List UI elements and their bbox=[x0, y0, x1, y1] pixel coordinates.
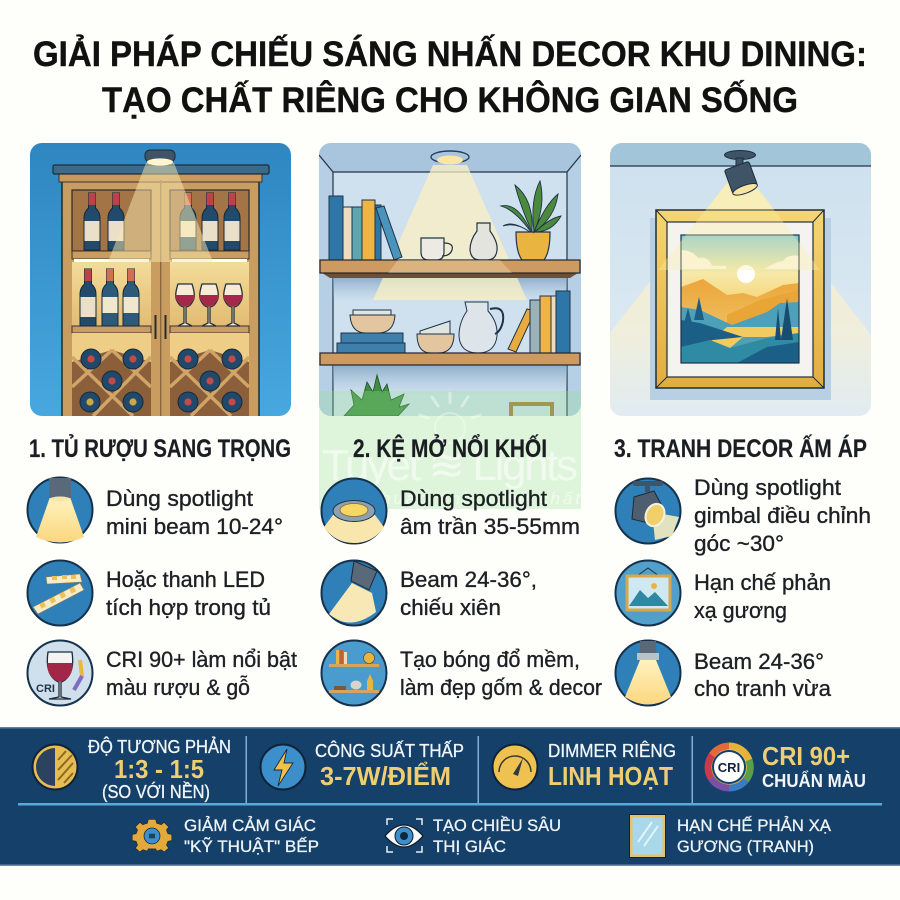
icon: picture bbox=[616, 560, 680, 626]
text: gimbal spotlight: góc ~30° bbox=[694, 531, 784, 556]
stat: CRI: CHUẨN MÀU bbox=[762, 770, 866, 791]
icon: CRI wine glass bbox=[28, 640, 92, 706]
heading: open shelves: 2. KỆ MỞ NỔI KHỐI bbox=[353, 433, 547, 463]
shelf lower bbox=[320, 353, 580, 365]
icon: gear bbox=[132, 819, 172, 852]
stat: contrast: 1:3 - 1:5 bbox=[114, 754, 204, 784]
stat: CRI bbox=[762, 741, 866, 791]
heading: wine cabinet: 1. TỦ RƯỢU SANG TRỌNG bbox=[29, 433, 291, 463]
picture frame bbox=[656, 210, 824, 388]
stat: power: CÔNG SUẤT THẤP bbox=[315, 740, 464, 761]
text: angled beam bbox=[400, 567, 537, 620]
icon: mirror bbox=[630, 814, 666, 858]
icon: CRI colour wheel bbox=[708, 746, 750, 788]
watermark bbox=[319, 391, 581, 509]
icon: shelves with shadows bbox=[322, 640, 386, 706]
stat: dimmer: LINH HOẠT bbox=[548, 761, 673, 791]
icon: CRI wine glass: CRI bbox=[36, 683, 55, 695]
wine bottles bbox=[80, 193, 243, 412]
upper shelf books bbox=[329, 196, 402, 260]
icon: beam cone bbox=[616, 640, 680, 706]
stat: dimmer: DIMMER RIÊNG bbox=[548, 741, 676, 761]
bottom plant and frame bbox=[344, 375, 552, 418]
text: angled beam: Beam 24-36°, bbox=[400, 567, 537, 592]
icon: mini beam spotlight bbox=[28, 478, 92, 542]
text: angled beam: chiếu xiên bbox=[400, 595, 501, 620]
stat: CRI: CRI 90+ bbox=[762, 741, 850, 771]
text: recessed downlight: âm trần 35-55mm bbox=[400, 514, 580, 539]
text: mirror: GƯƠNG (TRANH) bbox=[677, 837, 814, 856]
landscape painting bbox=[681, 235, 799, 363]
text: mini beam: Dùng spotlight bbox=[106, 486, 253, 511]
text: CRI bbox=[106, 647, 297, 700]
ceiling light bbox=[145, 150, 175, 166]
light beam over frame bbox=[658, 183, 820, 270]
lower shelf books, bowls and jug bbox=[337, 291, 570, 353]
track spotlight bbox=[724, 150, 759, 197]
text: mini beam bbox=[106, 486, 283, 539]
rack lattice bbox=[72, 350, 249, 416]
text: depth: THỊ GIÁC bbox=[433, 837, 506, 856]
icon: angled beam bbox=[322, 560, 386, 626]
icon: LED strip bbox=[28, 560, 92, 626]
text: CRI: CRI 90+ làm nổi bật bbox=[106, 647, 297, 672]
stat: dimmer bbox=[548, 741, 676, 791]
icon: recessed downlight bbox=[322, 478, 386, 544]
title: GIẢI PHÁP CHIẾU SÁNG NHẤN DECOR KHU DINING: bbox=[33, 34, 867, 74]
vase bbox=[470, 223, 497, 260]
stat: contrast: (SO VỚI NỀN) bbox=[102, 781, 210, 802]
icon: lightning bbox=[260, 744, 306, 790]
footer band bbox=[0, 727, 900, 866]
text: recessed downlight: Dùng spotlight bbox=[400, 486, 547, 511]
cup bbox=[421, 238, 452, 260]
text: beam cone bbox=[694, 649, 832, 701]
text: shelves with shadows: làm đẹp gốm & decor bbox=[400, 675, 602, 700]
text: LED strip: tích hợp trong tủ bbox=[106, 595, 271, 620]
watermark: Tuyet ≋ Lights bbox=[322, 441, 578, 490]
icon: eye bbox=[385, 819, 423, 852]
text: kitchen feel: GIẢM CẢM GIÁC bbox=[184, 816, 316, 835]
text: picture bbox=[694, 570, 831, 623]
stat: power bbox=[315, 740, 464, 791]
icon: gimbal spotlight bbox=[616, 478, 680, 544]
icon: dimmer gauge bbox=[492, 744, 538, 790]
stat: contrast: ĐỘ TƯƠNG PHẢN bbox=[88, 736, 231, 757]
text: mirror bbox=[677, 816, 832, 856]
stat: power: 3-7W/ĐIỂM bbox=[320, 761, 451, 791]
text: mini beam: mini beam 10-24° bbox=[106, 514, 283, 539]
light beam bbox=[108, 163, 213, 262]
panel: framed art illustration bbox=[610, 143, 871, 416]
title bbox=[33, 34, 867, 120]
icon: contrast bbox=[32, 744, 78, 790]
text: beam cone: Beam 24-36° bbox=[694, 649, 824, 674]
text: CRI: màu rượu & gỗ bbox=[106, 675, 250, 700]
text: depth: TẠO CHIỀU SÂU bbox=[433, 816, 561, 835]
text: depth bbox=[433, 816, 561, 856]
text: gimbal spotlight: gimbal điều chỉnh bbox=[694, 503, 871, 528]
text: gimbal spotlight: Dùng spotlight bbox=[694, 475, 841, 500]
text: shelves with shadows bbox=[400, 647, 602, 700]
title: TẠO CHẤT RIÊNG CHO KHÔNG GIAN SỐNG bbox=[102, 80, 798, 120]
text: LED strip bbox=[106, 567, 271, 620]
text: beam cone: cho tranh vừa bbox=[694, 676, 832, 701]
light beam bbox=[373, 165, 527, 300]
icon: CRI colour wheel: CRI bbox=[718, 760, 740, 775]
panel: open shelves illustration bbox=[319, 143, 581, 418]
watermark: Đèn chuẩn ánh sáng chất bbox=[322, 489, 581, 508]
stat: contrast bbox=[88, 736, 231, 802]
text: kitchen feel: "KỸ THUẬT" BẾP bbox=[184, 837, 319, 856]
text: shelves with shadows: Tạo bóng đổ mềm, bbox=[400, 647, 580, 672]
potted plant bbox=[501, 181, 561, 260]
text: mirror: HẠN CHẾ PHẢN XẠ bbox=[677, 816, 832, 835]
panel: wine cabinet illustration bbox=[30, 143, 291, 421]
text: LED strip: Hoặc thanh LED bbox=[106, 567, 265, 592]
text: gimbal spotlight bbox=[694, 475, 871, 556]
text: kitchen feel bbox=[184, 816, 319, 856]
text: picture: xạ gương bbox=[694, 598, 787, 623]
text: recessed downlight bbox=[400, 486, 580, 539]
shelf upper bbox=[320, 260, 580, 278]
text: picture: Hạn chế phản bbox=[694, 570, 831, 595]
ceiling light bbox=[431, 151, 469, 164]
